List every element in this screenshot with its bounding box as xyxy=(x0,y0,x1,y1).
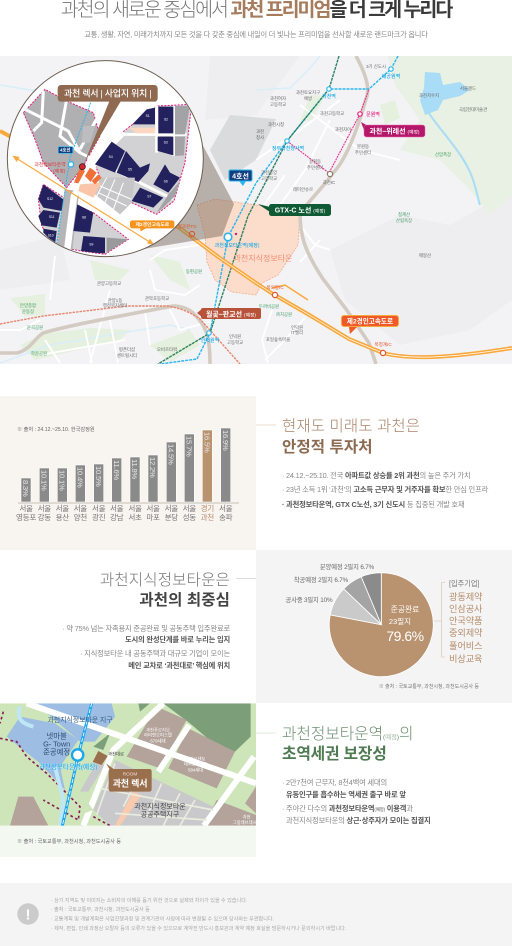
map labels: 과천지식정보타운 xyxy=(234,253,292,263)
map labels: 넷마블 xyxy=(47,731,67,740)
icon: notice xyxy=(17,903,39,925)
bar chart: 강동 xyxy=(38,512,51,522)
map labels: 행정복지센터 xyxy=(103,302,127,309)
block labels: S7 xyxy=(147,195,152,199)
map labels: 과천 xyxy=(243,814,251,821)
map labels: 포일숲속마을 xyxy=(266,336,290,343)
map labels: 3기 신도시 xyxy=(366,63,386,70)
map labels: 정부과천청사역 xyxy=(272,145,304,152)
map labels: 오비즈타워 xyxy=(157,346,177,353)
callout: 과천-위례선: 과천–위례선 (예정) xyxy=(369,126,420,136)
disclaimer: · 출처 : 국토교통부, 과천시청, 과천도시공사 등 xyxy=(51,906,150,913)
pie labels xyxy=(286,562,424,644)
map labels: 동편공원 xyxy=(186,268,202,274)
bar chart: 서울 xyxy=(183,504,196,513)
station: 과천정보타운역: (예정) xyxy=(53,168,66,175)
map labels: 예방 xyxy=(304,95,312,102)
disclaimer: · 교통계획 및 개발계획은 사업진행과정 및 관계기관의 사정에 따라 변경될 수 있으며 당사와는 무관합니다. xyxy=(51,916,274,922)
map labels: 인덕원역 xyxy=(201,337,220,344)
district: 과천지식정보타운 xyxy=(197,199,300,295)
tenant list: [입주기업] xyxy=(449,579,479,588)
callout: 사업지 위치 xyxy=(58,85,158,162)
bar chart: 성동 xyxy=(183,513,196,522)
map labels: 584세대 xyxy=(188,766,203,773)
map labels: 까치공원 xyxy=(276,311,292,318)
bar chart: 강남 xyxy=(110,512,124,522)
map labels xyxy=(20,63,487,359)
text block: 과천의 최중심: · 약 75% 넘는 자족용지 준공완료 및 공동주택 입주완료로 xyxy=(62,624,230,633)
tenant list: 광동제약 xyxy=(449,591,483,602)
map labels: 공공주택지구 xyxy=(141,809,180,818)
inset: zoomed site map xyxy=(7,61,203,259)
text block: 과천의 최중심: 메인 교차로 ‘과천대로’ 핵심에 위치 xyxy=(128,661,230,670)
source note: ※ 출처 : 국토교통부, 과천시청, 과천도시공사 등 xyxy=(17,837,121,845)
pie chart xyxy=(329,573,433,677)
disclaimer: · 제작, 편집, 인쇄 과정상 오탈자 등의 오류가 있을 수 있으므로 계약전 반드시 홍보관과 계약 예정 호실을 방문하시거나 문의하시기 바랍니다. xyxy=(51,925,346,932)
block labels: S2 xyxy=(164,117,168,121)
panel: station map xyxy=(0,703,261,857)
callout: 제2경인고속도로: 제2경인고속도로 xyxy=(135,221,170,228)
tenant list: 풀어비스 xyxy=(449,641,482,651)
4호선 tag: 4호선 xyxy=(60,147,71,153)
block labels: S6 xyxy=(164,179,168,183)
navy blocks xyxy=(38,107,180,253)
text block: 초역세권 보장성 xyxy=(256,725,430,825)
map labels: 선암폭장 xyxy=(435,151,451,158)
map labels: 고등학교 xyxy=(270,101,286,108)
text block: 초역세권 보장성: 과천지식정보타운의 상근·상주자가 모이는 집결지 xyxy=(286,816,430,825)
footer xyxy=(0,883,512,946)
bar chart xyxy=(16,428,239,522)
map labels: 주민센터 xyxy=(307,164,323,171)
station: 과천정보타운역 xyxy=(34,161,74,175)
rail: 월곶-판교선 xyxy=(0,306,240,364)
map labels: 평촌더샵 xyxy=(119,346,135,353)
bar chart: 서울 xyxy=(56,504,69,513)
tenant list xyxy=(434,579,483,664)
text block: 초역세권 보장성: 과천정보타운역(예정)의 xyxy=(282,725,413,743)
expressway arrow xyxy=(13,156,154,245)
callout: 제2경인고속도로 xyxy=(342,316,398,334)
map labels: 과천시청 xyxy=(268,121,284,128)
block labels xyxy=(47,114,168,246)
rail: GTX-C xyxy=(158,56,339,364)
block labels: S4 xyxy=(109,155,113,159)
source note: ※ 출처 : 24.12.~25.10. 한국감정원 xyxy=(17,425,95,433)
map labels: 고등학교 xyxy=(227,339,243,346)
map labels: 인덕원 xyxy=(291,324,303,331)
callout: GTX-C xyxy=(258,204,331,216)
source note: ※ 출처 : 국토교통부, 과천시청, 과천도시공사 등 xyxy=(379,683,479,690)
block labels: S8 xyxy=(82,216,86,220)
map labels: 679세대 xyxy=(150,737,166,744)
map labels: 북청계IC xyxy=(374,341,392,348)
map labels: 산림욕장 xyxy=(396,217,412,224)
map labels: 과천중앙 xyxy=(261,169,277,176)
map labels: 라비엔오피스텔 xyxy=(144,732,172,739)
bar chart: 11.8% xyxy=(130,459,139,479)
government area xyxy=(210,115,276,180)
pie labels: 23필지 xyxy=(389,616,411,626)
map labels: 과천르센토 xyxy=(186,755,206,762)
map labels: 과천토요지구 xyxy=(296,89,320,96)
road: tan beltways xyxy=(0,56,376,364)
bar chart: 광진 xyxy=(92,512,106,522)
text block: 과천의 최중심: 과천의 최중심 xyxy=(139,591,230,609)
callout: GTX-C: GTX-C 노선 (예정) xyxy=(275,206,326,214)
map labels: 안양과천TG xyxy=(173,223,197,230)
bar chart: 과천 xyxy=(201,512,214,522)
bar chart: 서울 xyxy=(74,504,87,513)
block labels: S3 xyxy=(164,140,168,144)
bar chart: 15.7% xyxy=(184,436,194,457)
text block: 과천의 최중심: 과천지식정보타운은 xyxy=(100,571,230,589)
bar chart: 서울 xyxy=(165,504,178,513)
map labels: 과천자이 xyxy=(335,126,351,133)
map labels: 센트럴시티 xyxy=(117,352,137,359)
text block: 초역세권 보장성: · 2만7천여 근무자, 8천4백여 세대의 xyxy=(282,778,387,787)
bar chart: 12.2% xyxy=(148,457,157,478)
bar chart: 양천 xyxy=(74,512,87,522)
map labels: 주민센터 xyxy=(355,149,371,156)
bar chart: 16.5% xyxy=(202,432,212,453)
4호선 tag xyxy=(58,147,73,153)
callout: 4호선 xyxy=(229,170,252,186)
callout: 과천-위례선 xyxy=(361,122,425,137)
text block: 안정적 투자처: · 과천정보타운역, GTX C노선, 3기 신도시 등 집중된 개발 호재 xyxy=(282,500,464,509)
panel: land status xyxy=(256,550,512,703)
bar chart: 용산 xyxy=(56,512,69,522)
pie labels: 착공예정 2필지 6.7% xyxy=(294,575,349,584)
map labels: 두꺼비공원 xyxy=(259,303,279,310)
bar chart: 서초 xyxy=(128,513,142,522)
map labels: 관양고등학교 xyxy=(97,280,121,287)
map labels: G- Town xyxy=(43,740,70,749)
tenant list: 안국약품 xyxy=(449,615,482,626)
map labels: 과천대로 xyxy=(108,751,124,758)
rail: 4호선 xyxy=(160,56,398,364)
station: 과천정보타운역: 과천정보타운역 xyxy=(34,161,66,168)
map labels: 안양종합 xyxy=(20,302,36,308)
text block: 안정적 투자처: · 23년 소득 1위 ‘과천’의 고소득 근무자 및 거주자를 확보한 안심 인프라 xyxy=(282,485,489,494)
map labels xyxy=(39,715,261,826)
map labels: 서울랜드 xyxy=(460,85,476,92)
site lot xyxy=(93,751,108,765)
bar chart: 서울 xyxy=(110,504,124,513)
block labels: S9 xyxy=(89,242,94,246)
bar chart: 8.3% xyxy=(21,480,30,497)
map labels: 과천정보타운역(예정) xyxy=(39,762,97,771)
map labels: 운곡공원 xyxy=(27,324,43,331)
stations xyxy=(189,67,393,356)
map labels: 과천정보타운역(예정) xyxy=(215,242,260,249)
tenant list: 중외제약 xyxy=(449,627,483,638)
callout: 과천 렉서 xyxy=(106,763,152,792)
map labels: 데시앙아파트 xyxy=(184,761,208,768)
bar chart: 송파 xyxy=(219,513,233,522)
block labels: S10 xyxy=(48,233,54,237)
bar chart: 서울 xyxy=(128,504,142,513)
text block: 안정적 투자처: · 24.12.~25.10. 전국 아파트값 상승률 2위 과천의 높은 주거 가치 xyxy=(282,471,471,480)
pie labels: 공사중 3필지 10% xyxy=(286,595,333,604)
text block: 안정적 투자처 xyxy=(256,417,489,509)
lake xyxy=(420,72,470,115)
wedge: zoom shadow xyxy=(95,140,234,257)
map labels: 갈현동 xyxy=(309,158,321,164)
callout: 사업지 위치: 과천 렉서 | 사업지 위치 | xyxy=(64,88,151,99)
callout: 월곶-판교선: 월곶–판교선 (예정) xyxy=(206,310,256,318)
map labels: 학운공원 xyxy=(31,350,47,357)
panel: location map xyxy=(0,56,512,364)
block labels: S5 xyxy=(128,168,132,172)
bar chart: 영등포 xyxy=(16,512,36,522)
map labels: 과천IC xyxy=(323,179,335,186)
subtitle: 교통, 생활, 자연, 미래가치까지 모든 것을 다 갖춘 중심에 내일이 더 빛나는 프리미엄을 선사할 새로운 랜드마크가 옵니다 xyxy=(84,30,428,39)
map labels: 청사 xyxy=(256,134,264,141)
panel: price growth xyxy=(0,396,256,550)
text block: 과천의 최중심: · 지식정보타운 내 공동주택과 대규모 기업이 모이는 xyxy=(80,649,230,658)
map labels: 과천 xyxy=(256,128,264,135)
map labels: 고등학교 xyxy=(261,175,277,182)
bar chart: 서울 xyxy=(219,504,233,513)
bar chart: 서울 xyxy=(38,504,51,513)
text block: 초역세권 보장성: 초역세권 보장성 xyxy=(282,745,387,763)
station marker xyxy=(72,749,83,761)
bar chart: 11.6% xyxy=(112,460,121,480)
bar chart: 10.1% xyxy=(58,470,66,491)
map labels: 과천저수지 xyxy=(419,92,439,99)
pie labels: 준공완료 xyxy=(391,605,419,614)
text block: 초역세권 보장성: · 주야간 다수의 과천정보타운역(예정) 이용객과 xyxy=(282,804,413,813)
map labels: 관양1동 xyxy=(108,297,122,303)
callout: 제2경인고속도로: 제2경인고속도로 xyxy=(347,316,393,326)
bar chart: 서울 xyxy=(92,504,106,513)
map labels: 래미안슈르 xyxy=(293,186,313,193)
callout: 과천 렉서: ROOM xyxy=(123,771,137,776)
map labels: 청계산 xyxy=(398,211,410,218)
map labels: 관악초등학교 xyxy=(145,295,169,302)
map labels: 매봉산 xyxy=(419,252,431,259)
bar chart: 마포 xyxy=(146,513,160,522)
callout: 월곶-판교선 xyxy=(197,308,261,319)
callout: 4호선: 4호선 xyxy=(232,172,249,180)
map labels: 대공원역 xyxy=(382,73,401,80)
map labels: 과천푸르지오 xyxy=(146,727,170,734)
site areas xyxy=(23,89,192,256)
map labels: 국립현대미술관 xyxy=(459,106,487,113)
orange blocks xyxy=(74,128,155,198)
callout: 과천 렉서: 과천 렉서 xyxy=(113,778,147,789)
bar chart: 서울 xyxy=(146,504,160,513)
bar chart: 서울 xyxy=(19,504,33,513)
text block: 안정적 투자처: 안정적 투자처 xyxy=(282,438,373,456)
text block: 과천의 최중심: 도시의 완성단계를 바로 누리는 입지 xyxy=(125,635,230,644)
bar chart: 16.9% xyxy=(221,430,230,451)
map labels: 문원역 xyxy=(366,111,380,118)
callout: 제2경인고속도로 xyxy=(130,220,174,231)
bar chart: 10.4% xyxy=(76,467,84,488)
gray blocks xyxy=(82,106,190,214)
text block: 초역세권 보장성: 유동인구를 흡수하는 역세권 출구 바로 앞 xyxy=(286,790,406,799)
bar chart: 경기 xyxy=(201,503,214,513)
disclaimer xyxy=(51,897,346,932)
bar chart: 14.5% xyxy=(166,444,176,465)
map labels: 인덕원 xyxy=(229,333,241,340)
block labels: S12 xyxy=(47,197,53,201)
pie labels: 79.6% xyxy=(386,628,424,644)
map labels: 문원동 xyxy=(357,143,369,149)
tenant list: 인삼공사 xyxy=(449,604,483,614)
bar chart: 분당 xyxy=(165,512,178,522)
map labels: 북의왕IC xyxy=(266,284,284,291)
rail: 과천-위례선 xyxy=(287,89,369,173)
block labels: S1 xyxy=(146,114,150,118)
map labels: 과천지식정보타운 xyxy=(134,801,186,810)
map labels: 과천역 xyxy=(322,93,336,100)
map labels: 과천지식정보타운 지구 xyxy=(47,715,113,724)
icon: notice: ! xyxy=(26,906,30,924)
bar chart: 10.5% xyxy=(94,466,103,487)
bar chart: 10.1% xyxy=(40,470,48,491)
block labels: S11 xyxy=(49,215,55,219)
map labels: 과천여자 xyxy=(270,95,286,102)
map labels: 과천고등학교 xyxy=(320,110,344,117)
text block: 과천의 최중심 xyxy=(62,571,256,670)
map labels: 준공예정 xyxy=(43,747,70,756)
tenant list: 비상교육 xyxy=(449,654,482,664)
pie labels: 분양예정 2필지 6.7% xyxy=(320,562,375,571)
map labels: IT밸리 xyxy=(291,329,303,336)
disclaimer: · 상기 지역도 및 이미지는 소비자의 이해를 돕기 위한 것으로 실제와 차이가 있을 수 있습니다. xyxy=(51,897,247,904)
text block: 안정적 투자처: 현재도 미래도 과천은 xyxy=(282,417,420,435)
map labels: 그랑레브데시앙 xyxy=(233,819,261,826)
map labels: 운동장 xyxy=(22,308,34,314)
marker: site xyxy=(79,164,85,170)
highway xyxy=(0,131,512,357)
